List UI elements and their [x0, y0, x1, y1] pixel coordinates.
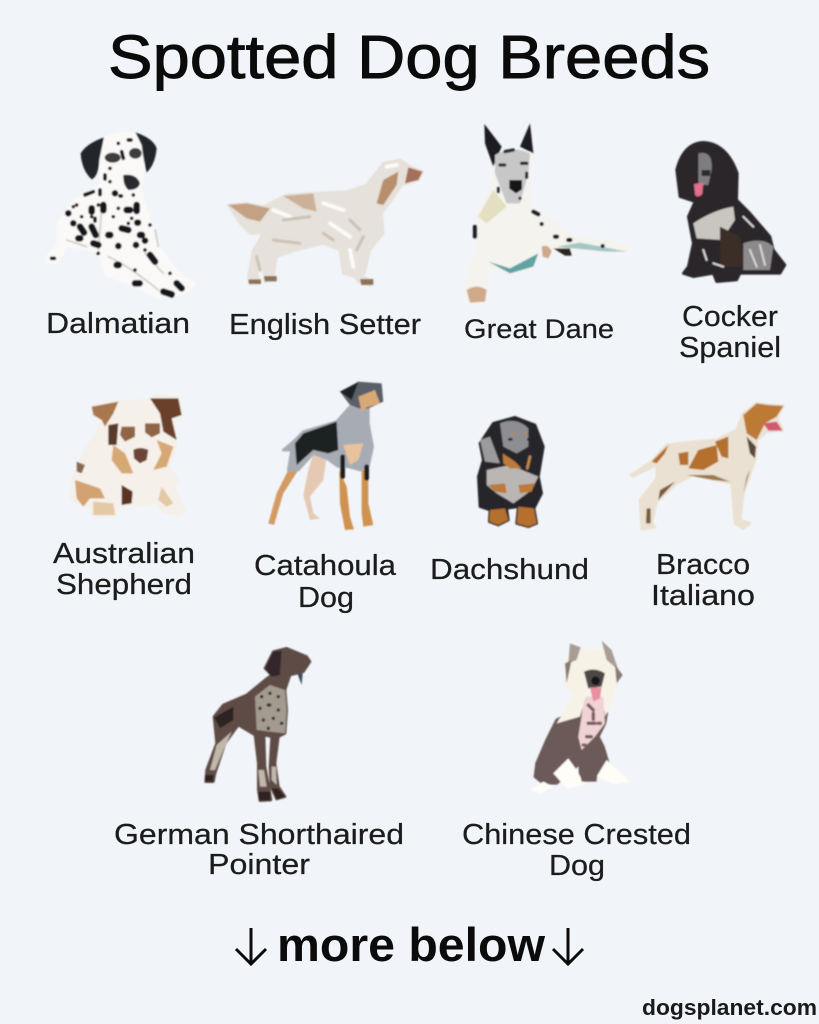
arrow: left down	[236, 928, 266, 964]
label: Chinese Crested Dog	[462, 819, 691, 882]
more below callout	[236, 918, 583, 971]
dog: Cocker Spaniel	[677, 142, 785, 282]
label: Catahoula Dog: Catahoula	[254, 550, 397, 582]
label: German Shorthaired Pointer: Pointer	[208, 849, 310, 881]
label: Chinese Crested Dog: Chinese Crested	[462, 819, 691, 851]
label: English Setter: English Setter	[229, 309, 421, 341]
label: German Shorthaired Pointer	[114, 819, 404, 881]
label: Dalmatian: Dalmatian	[46, 308, 190, 340]
dog: German Shorthaired Pointer	[205, 648, 310, 801]
title: Spotted Dog Breeds	[108, 23, 710, 91]
more below text: more below	[277, 918, 545, 971]
dog: Bracco Italiano	[631, 403, 783, 529]
dog: Great Dane	[465, 123, 628, 303]
label: Dachshund: Dachshund	[430, 554, 589, 586]
label: Cocker Spaniel: Cocker	[682, 301, 778, 333]
dog: Chinese Crested Dog	[530, 641, 630, 793]
source: dogsplanet.com: dogsplanet.com	[642, 995, 817, 1020]
label: Cocker Spaniel: Spaniel	[679, 332, 781, 364]
label: Cocker Spaniel	[679, 301, 781, 364]
label: Australian Shepherd	[53, 538, 195, 601]
label: Bracco Italiano: Italiano	[651, 580, 755, 612]
dog: Catahoula Dog	[268, 382, 383, 530]
dog: English Setter	[228, 160, 423, 286]
label: Australian Shepherd: Shepherd	[56, 569, 192, 601]
label: Catahoula Dog	[254, 550, 397, 614]
dog: Dalmatian	[47, 132, 195, 297]
label: Chinese Crested Dog: Dog	[549, 850, 605, 882]
label: German Shorthaired Pointer: German Shorthaired	[114, 819, 404, 851]
dog: Dachshund	[478, 417, 543, 527]
label: Australian Shepherd: Australian	[53, 538, 195, 570]
label: Bracco Italiano	[651, 549, 755, 612]
label: Bracco Italiano: Bracco	[656, 549, 750, 581]
arrow: right down	[553, 928, 583, 964]
label: Great Dane: Great Dane	[464, 314, 614, 344]
dog: Australian Shepherd	[70, 395, 185, 517]
label: Catahoula Dog: Dog	[298, 582, 354, 614]
